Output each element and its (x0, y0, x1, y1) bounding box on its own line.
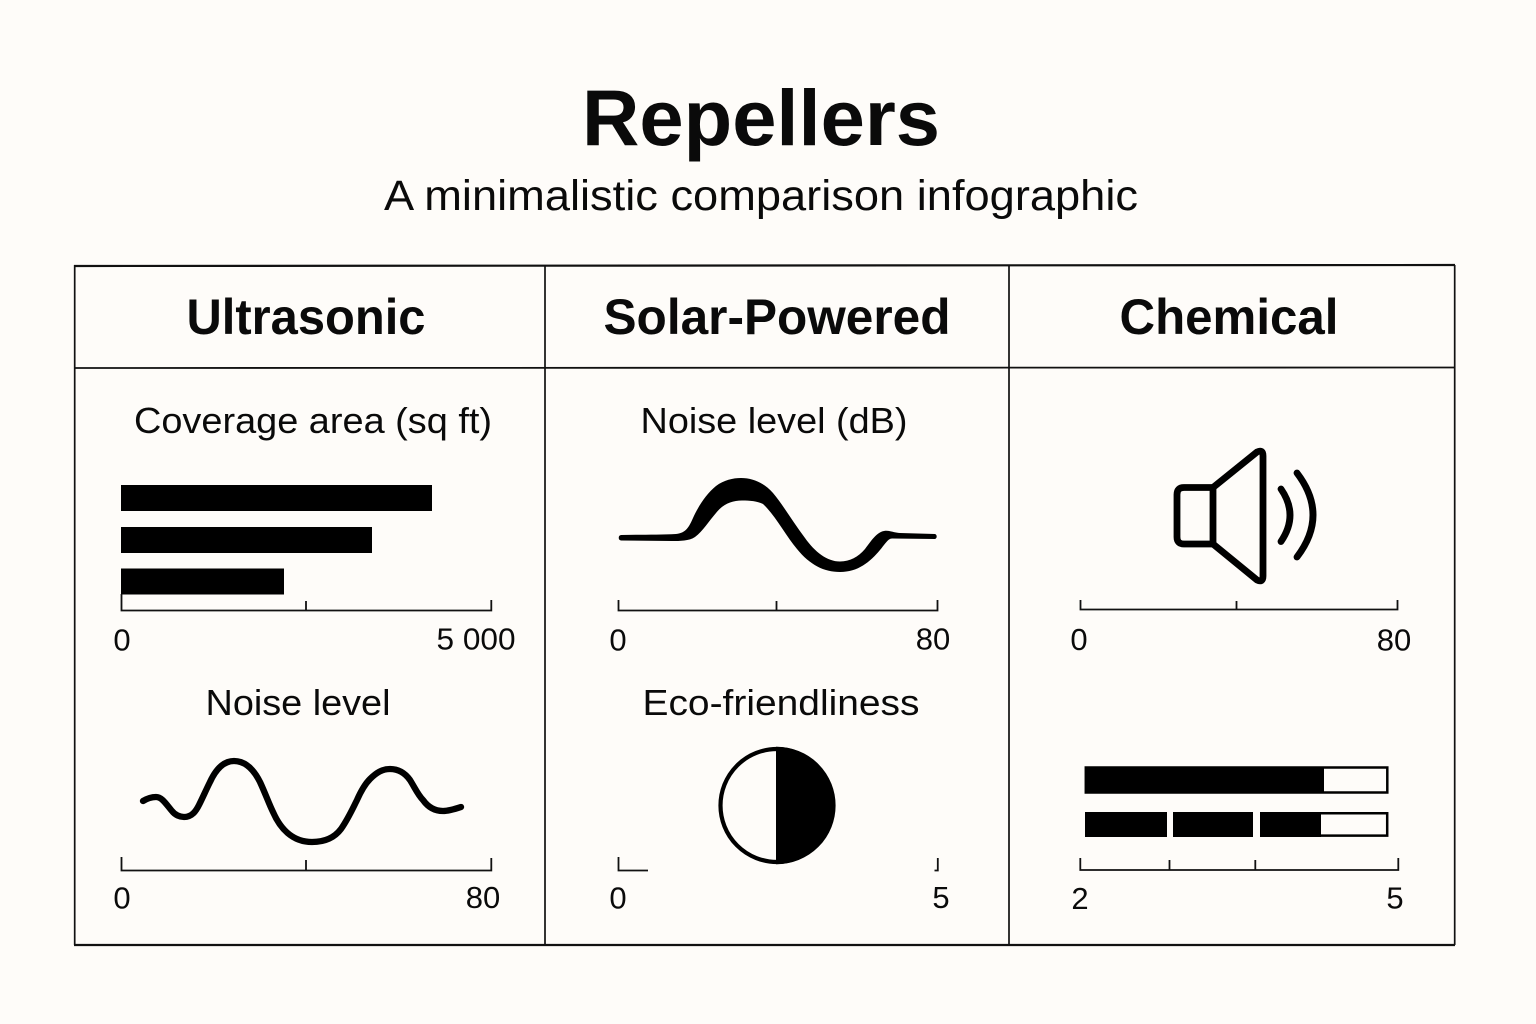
heading: Solar-Powered: Solar-Powered (604, 289, 950, 345)
axis label: solar noise max: 80 (916, 622, 950, 656)
heading: Chemical: Chemical (1120, 289, 1338, 345)
chart title: coverage area: Coverage area (sq ft) (134, 400, 492, 441)
axis label: rating min: 2 (1071, 881, 1089, 916)
axis label: coverage min: 0 (113, 622, 131, 658)
axis label: eco max: 5 (932, 880, 950, 915)
axis: chemical noise (1080, 600, 1398, 610)
axis label: noise max: 80 (466, 880, 500, 915)
wave: solar noise (619, 478, 937, 572)
chart title: eco-friendliness: Eco-friendliness (642, 682, 920, 723)
axis label: noise min: 0 (113, 880, 131, 916)
panel: solar noise level (609, 400, 950, 658)
title: Repellers (582, 73, 940, 162)
panel: chemical noise (1070, 451, 1411, 658)
axis label: chemical noise max: 80 (1377, 622, 1411, 658)
icon: speaker (1177, 451, 1313, 581)
axis: solar noise (618, 600, 938, 610)
bar: segmented rating (1085, 812, 1387, 837)
axis label: eco min: 0 (609, 880, 627, 916)
axis label: chemical noise min: 0 (1070, 622, 1088, 657)
axis: eco (618, 857, 938, 870)
axis label: coverage max: 5 000 (436, 622, 516, 656)
axis: coverage (122, 594, 491, 610)
axis label: rating max: 5 (1386, 880, 1404, 916)
wave: noise level (143, 761, 461, 842)
chart title: noise level dB: Noise level (dB) (640, 400, 908, 441)
subtitle: A minimalistic comparison infographic (384, 172, 1138, 220)
panel: solar eco-friendliness (609, 682, 950, 916)
axis: chemical rating (1080, 858, 1398, 870)
heading: Ultrasonic: Ultrasonic (186, 289, 426, 345)
bar chart: coverage (121, 485, 432, 594)
chart title: noise level: Noise level (206, 682, 390, 723)
panel: ultrasonic noise level (113, 682, 500, 916)
panel: ultrasonic coverage area (113, 400, 516, 658)
half circle gauge (720, 747, 835, 864)
comparison table frame (74, 265, 1455, 945)
bar: top rating (1085, 766, 1387, 794)
axis label: solar noise min: 0 (609, 622, 627, 658)
panel: chemical rating bars (1071, 766, 1404, 916)
axis: noise level (122, 857, 491, 870)
